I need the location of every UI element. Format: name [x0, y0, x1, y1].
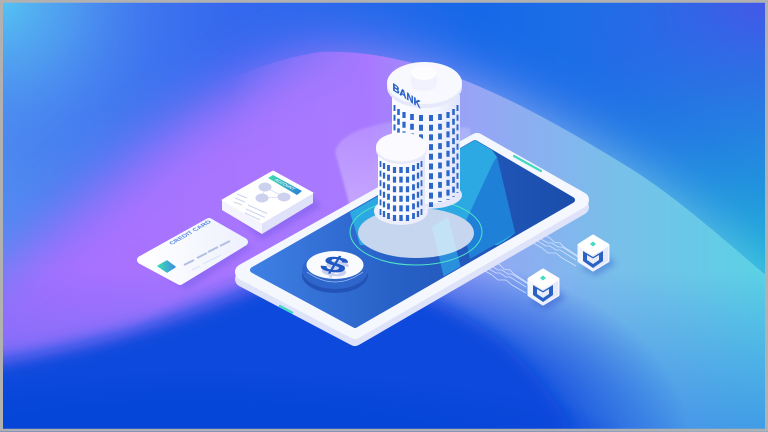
screen light reflection — [350, 140, 515, 276]
banner text: ACCOUNT — [273, 178, 297, 191]
phone screen — [253, 143, 572, 325]
light beam — [335, 122, 478, 235]
large tower windows — [394, 105, 458, 207]
bank building — [374, 62, 462, 225]
speaker — [514, 156, 541, 171]
large tower — [387, 62, 462, 209]
dollar sign: $ — [315, 251, 355, 279]
diagram nodes — [256, 182, 290, 202]
phone body — [243, 148, 581, 338]
small tower roof — [376, 136, 427, 164]
small tower — [374, 132, 428, 225]
document text lines — [234, 194, 267, 220]
document banner — [268, 175, 302, 195]
cube: left — [529, 270, 566, 310]
home indicator — [280, 306, 292, 312]
card chip — [158, 261, 175, 272]
document — [222, 171, 322, 240]
coin — [302, 251, 368, 293]
roof — [387, 66, 462, 108]
roof cap — [411, 74, 437, 91]
dollar sign: $ — [316, 255, 356, 283]
circuit lines — [480, 232, 578, 293]
bank sign: BANK — [392, 81, 421, 112]
smartphone — [243, 120, 581, 338]
hologram platform — [350, 204, 482, 266]
label: credit card: CREDIT CARD — [169, 220, 214, 246]
small tower windows — [380, 161, 422, 221]
credit card — [141, 220, 252, 290]
card numbers — [184, 241, 230, 265]
cube: right — [579, 236, 616, 276]
